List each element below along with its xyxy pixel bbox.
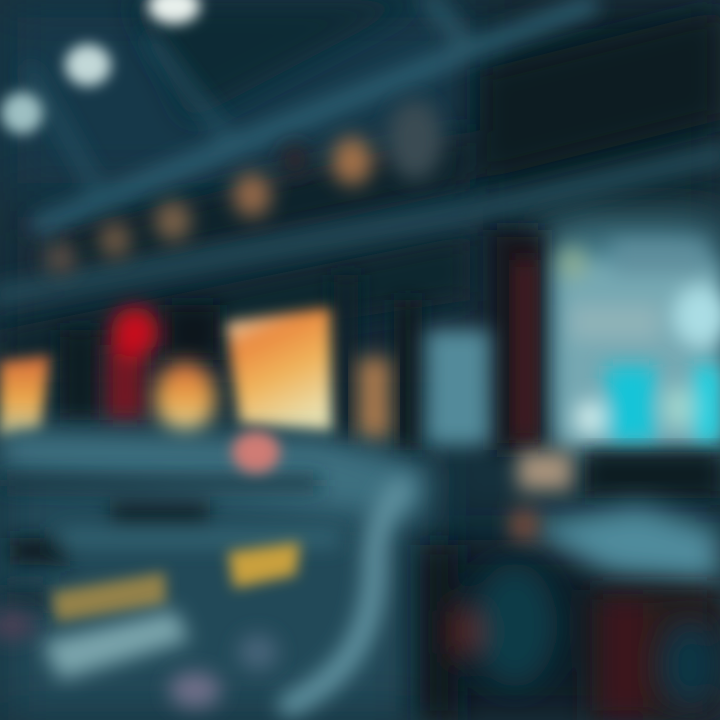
lilac console buttons xyxy=(0,610,278,708)
beige console block xyxy=(510,452,572,540)
dark ceiling panels xyxy=(0,0,720,370)
central furnace screen xyxy=(226,308,332,432)
right desk surface xyxy=(520,505,720,585)
red alarm panel xyxy=(106,307,159,420)
right monitor wall xyxy=(556,240,720,447)
pale console panel xyxy=(42,610,190,680)
pale blue column screen xyxy=(426,330,490,445)
dark console gaps xyxy=(0,476,340,613)
small furnace screen xyxy=(155,362,215,434)
lower-left console tiers xyxy=(0,430,430,520)
dark desk under monitors xyxy=(585,452,720,498)
dark uprights xyxy=(60,230,545,450)
lower-right dark equipment xyxy=(420,545,720,720)
left furnace screen xyxy=(0,356,50,436)
ceiling beams xyxy=(0,0,720,295)
narrow amber screen xyxy=(358,358,390,438)
ceiling lights xyxy=(1,0,200,134)
row of amber lamps xyxy=(44,100,443,274)
yellow console display xyxy=(228,542,300,588)
olive console display xyxy=(52,572,166,622)
monitor base glow xyxy=(556,240,720,447)
curved walkway rail xyxy=(290,490,400,705)
cyan monitor highlights xyxy=(575,366,720,442)
red pillar xyxy=(515,260,535,440)
pink gauge xyxy=(232,431,280,473)
